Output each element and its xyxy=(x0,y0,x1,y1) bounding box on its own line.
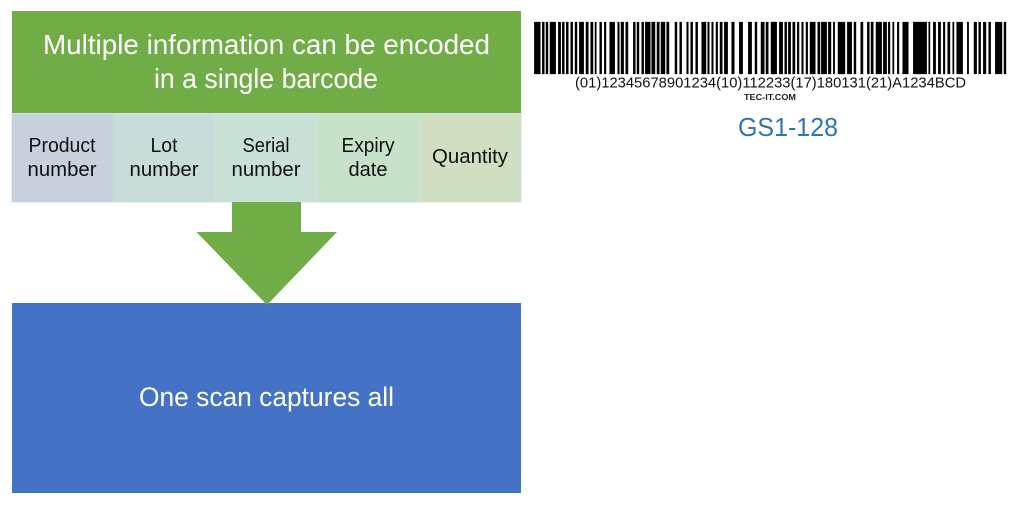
barcode: GS1-128 bars xyxy=(534,22,1006,74)
field: quantity xyxy=(420,114,521,202)
panel: one scan captures all xyxy=(12,303,521,493)
heading text: Multiple information can be encoded xyxy=(43,29,490,60)
barcode human-readable text: (01)12345678901234(10)112233(17)180131(21)A1234BCD xyxy=(575,76,966,92)
barcode vendor label: TEC-IT.COM xyxy=(744,92,796,102)
heading text xyxy=(43,29,490,94)
barcode caption: GS1-128 xyxy=(738,112,838,142)
field: product number: Product xyxy=(28,135,96,157)
panel: multiple information heading xyxy=(12,11,521,113)
field: product number xyxy=(12,114,114,202)
field: lot number: number xyxy=(130,159,199,181)
field: expiry date: date xyxy=(348,159,388,181)
field: serial number: Serial xyxy=(242,135,290,157)
field: product number: number xyxy=(28,159,97,181)
field: lot number xyxy=(114,114,214,202)
panel: one scan captures all: One scan captures all xyxy=(139,382,394,412)
field: expiry date: Expiry xyxy=(342,135,394,157)
field: serial number: number xyxy=(232,159,301,181)
field: quantity: Quantity xyxy=(432,146,508,168)
panel: data fields row xyxy=(12,113,522,202)
heading text: in a single barcode xyxy=(154,63,378,94)
field: lot number: Lot xyxy=(150,135,178,157)
field: serial number xyxy=(215,114,316,202)
arrow: down xyxy=(196,202,337,305)
field: expiry date xyxy=(317,114,420,202)
